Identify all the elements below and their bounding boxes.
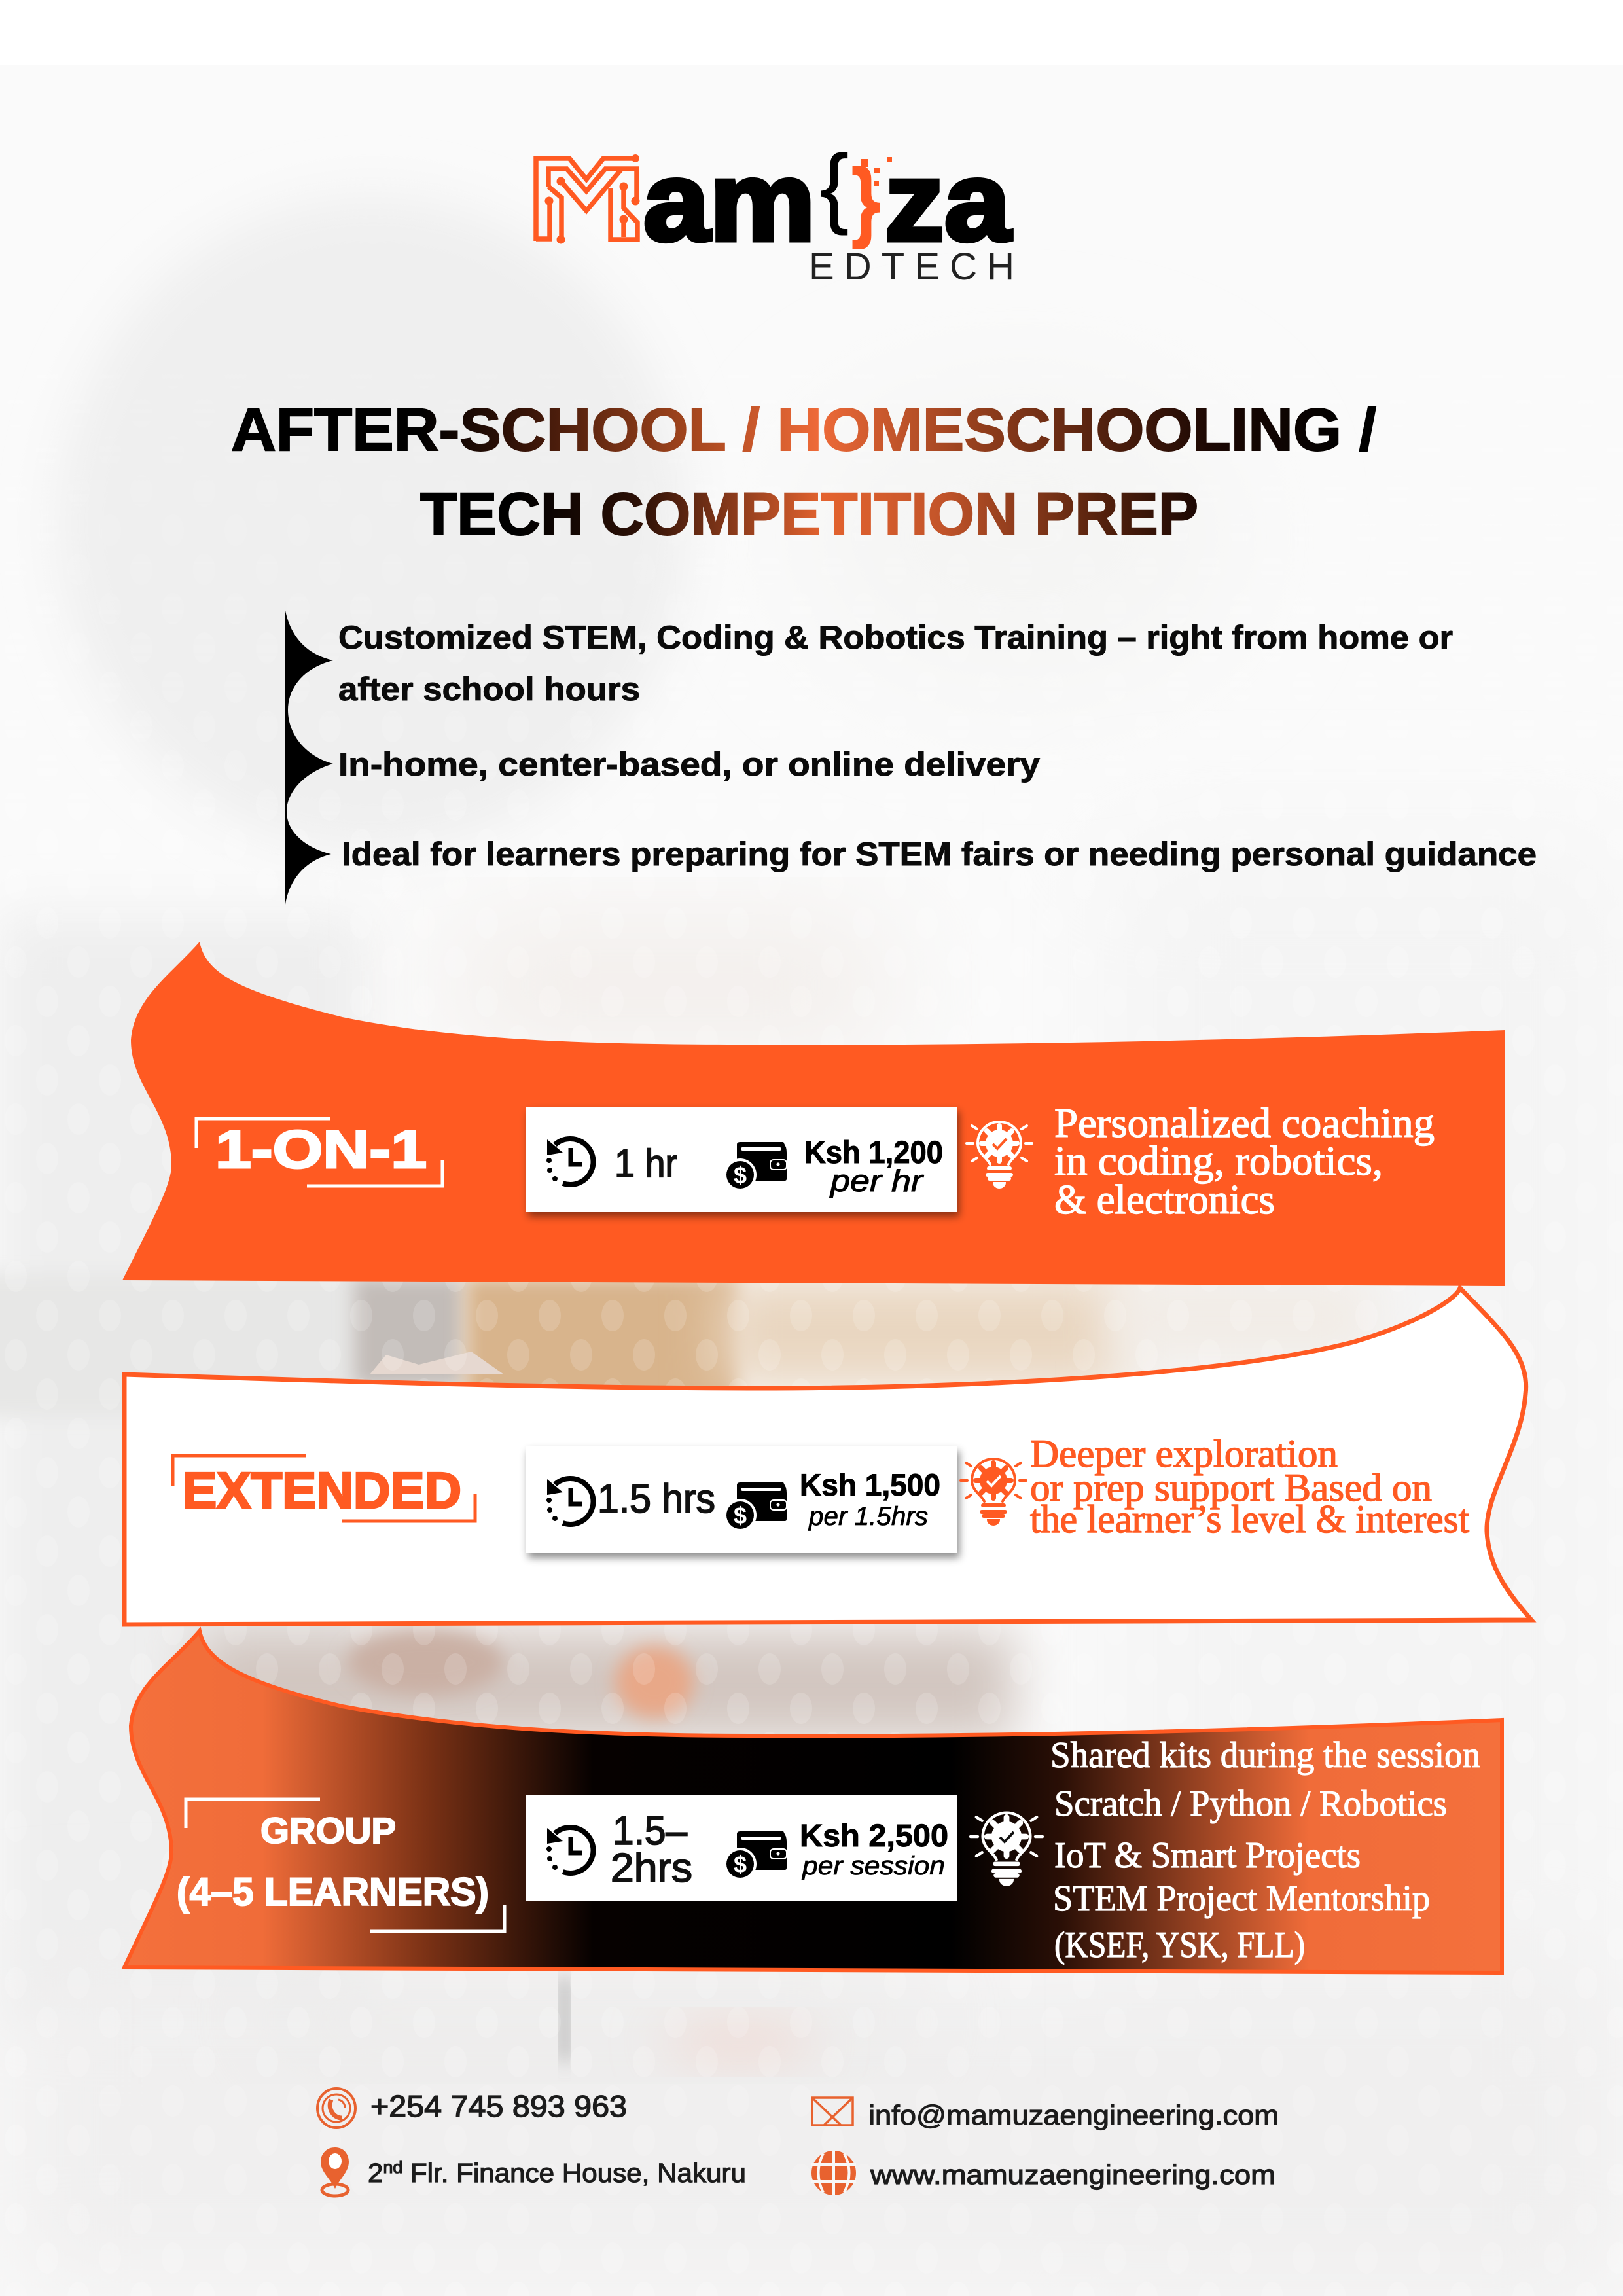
heading: extended: EXTENDED <box>183 1462 461 1519</box>
website: www.mamuzaengineering.com <box>870 2159 1275 2190</box>
phone number: +254 745 893 963 <box>370 2089 627 2123</box>
heading: 1-on-1: 1-ON-1 <box>215 1120 427 1179</box>
description: in coding, robotics, <box>1054 1138 1383 1184</box>
description: Shared kits during the session <box>1050 1735 1480 1776</box>
icon: clock <box>546 1827 593 1873</box>
description: Scratch / Python / Robotics <box>1054 1784 1447 1824</box>
heading: group <box>177 1799 505 1931</box>
panel: extended <box>124 1288 1531 1624</box>
duration <box>611 1808 692 1891</box>
logo wordmark: za <box>885 139 1011 264</box>
description: & electronics <box>1054 1176 1275 1223</box>
description: or prep support Based on <box>1030 1466 1432 1509</box>
title <box>231 397 1376 548</box>
icon: location pin <box>321 2147 349 2196</box>
info card <box>526 1107 957 1212</box>
description <box>1050 1735 1480 1965</box>
title: TECH COMPETITION PREP <box>420 481 1198 548</box>
logo tagline: EDTECH <box>809 245 1014 288</box>
logo wordmark: } <box>851 151 880 249</box>
price: Ksh 1,500 <box>800 1467 940 1502</box>
icon: wallet <box>724 1142 787 1191</box>
heading: 1-on-1 <box>196 1119 442 1186</box>
description <box>1030 1432 1469 1541</box>
logo wordmark <box>643 137 1011 264</box>
ribbon shape <box>122 942 1505 1286</box>
logo mark: circuit letter M <box>536 154 640 243</box>
ribbon shape <box>124 1288 1531 1624</box>
description <box>1054 1100 1435 1223</box>
price: Ksh 2,500 <box>800 1819 948 1854</box>
heading: group: GROUP <box>260 1810 396 1851</box>
address: Flr. Finance House, Nakuru <box>402 2158 746 2188</box>
icon: clock <box>546 1479 593 1524</box>
title: AFTER-SCHOOL / HOMESCHOOLING / <box>231 397 1376 463</box>
price unit: per hr <box>829 1164 924 1198</box>
info card <box>526 1446 957 1553</box>
icon: phone <box>317 2089 355 2128</box>
icon: email <box>812 2098 853 2125</box>
description: (KSEF, YSK, FLL) <box>1054 1925 1305 1965</box>
address: nd <box>383 2157 402 2177</box>
logo <box>536 137 1014 288</box>
icon: idea bulb <box>971 1813 1043 1886</box>
icon: idea bulb <box>961 1459 1026 1525</box>
ribbon shape <box>124 1631 1502 1973</box>
bullet: customized training: after school hours <box>338 671 640 708</box>
icon: wallet: $ <box>734 1162 747 1189</box>
description: Deeper exploration <box>1030 1432 1338 1475</box>
icon: globe <box>812 2151 856 2195</box>
logo wordmark: { <box>820 137 849 236</box>
bullet list <box>285 611 1537 905</box>
duration: 1 hr <box>615 1141 677 1185</box>
price unit: per session <box>802 1852 945 1880</box>
icon: idea bulb <box>967 1122 1032 1188</box>
bullet: delivery: In-home, center-based, or online delivery <box>338 746 1040 783</box>
bullet: customized training: Customized STEM, Coding & Robotics Training – right from home or <box>338 619 1453 656</box>
description: Personalized coaching <box>1054 1100 1435 1146</box>
duration: 1.5– <box>613 1808 687 1854</box>
price unit: per 1.5hrs <box>808 1502 928 1531</box>
icon: clock <box>546 1139 593 1185</box>
bullet: ideal learners: Ideal for learners preparing for STEM fairs or needing personal guidance <box>342 836 1537 872</box>
info card <box>526 1795 957 1901</box>
panel: 1-on-1 <box>122 942 1505 1286</box>
address: 2 <box>368 2158 383 2188</box>
contact details <box>317 2089 1279 2196</box>
duration: 1.5 hrs <box>597 1477 715 1522</box>
price: Ksh 1,200 <box>804 1136 943 1170</box>
description: STEM Project Mentorship <box>1053 1878 1430 1919</box>
description: the learner’s level & interest <box>1030 1498 1469 1541</box>
bullet: customized training <box>338 619 1453 708</box>
heading: group: (4–5 LEARNERS) <box>177 1870 489 1914</box>
email address: info@mamuzaengineering.com <box>868 2100 1279 2130</box>
bullet spine <box>285 611 333 905</box>
description: IoT & Smart Projects <box>1054 1835 1361 1876</box>
icon: wallet <box>724 1482 787 1532</box>
duration: 2hrs <box>611 1846 692 1891</box>
logo wordmark: am <box>643 139 815 264</box>
icon: wallet <box>724 1831 787 1880</box>
icon: wallet: $ <box>734 1502 747 1529</box>
icon: wallet: $ <box>734 1851 747 1878</box>
panel: group <box>124 1631 1502 1973</box>
